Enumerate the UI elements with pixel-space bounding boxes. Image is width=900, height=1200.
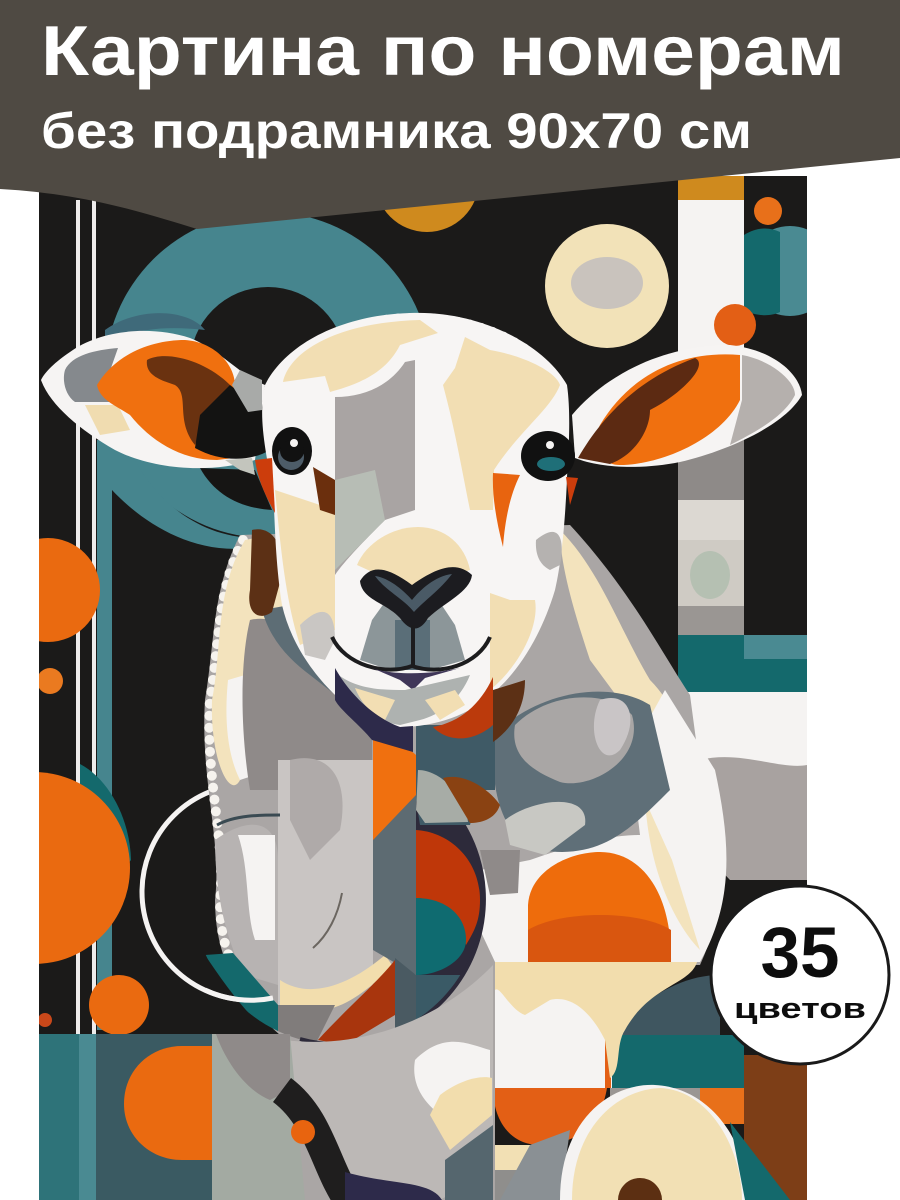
white wool behind sphere bbox=[480, 690, 726, 962]
left ear bbox=[41, 331, 270, 475]
badge: 35 colours: 35 bbox=[761, 914, 839, 993]
title: Картина по номерам bbox=[41, 11, 845, 90]
sheep head bbox=[255, 313, 578, 752]
chin bbox=[340, 675, 470, 725]
eyes bbox=[272, 427, 575, 481]
banner: title background bbox=[0, 0, 900, 229]
lower right shapes bbox=[493, 962, 807, 1200]
badge: 35 colours: цветов bbox=[734, 993, 866, 1025]
muzzle bbox=[357, 527, 470, 590]
hand bbox=[215, 825, 278, 985]
right ear bbox=[572, 345, 802, 467]
orange sphere bbox=[528, 852, 671, 962]
painting: abstract sheep bbox=[39, 176, 807, 1200]
nose and mouth bbox=[332, 567, 490, 690]
badge: 35 colours bbox=[711, 886, 889, 1064]
sheep body wool bbox=[204, 525, 726, 1200]
central circle segments bbox=[206, 795, 482, 1042]
background geometric shapes bbox=[39, 176, 807, 1200]
cream funnel bbox=[495, 962, 697, 1078]
subtitle: без подрамника 90х70 см bbox=[41, 103, 752, 159]
lower wool bbox=[285, 965, 493, 1200]
